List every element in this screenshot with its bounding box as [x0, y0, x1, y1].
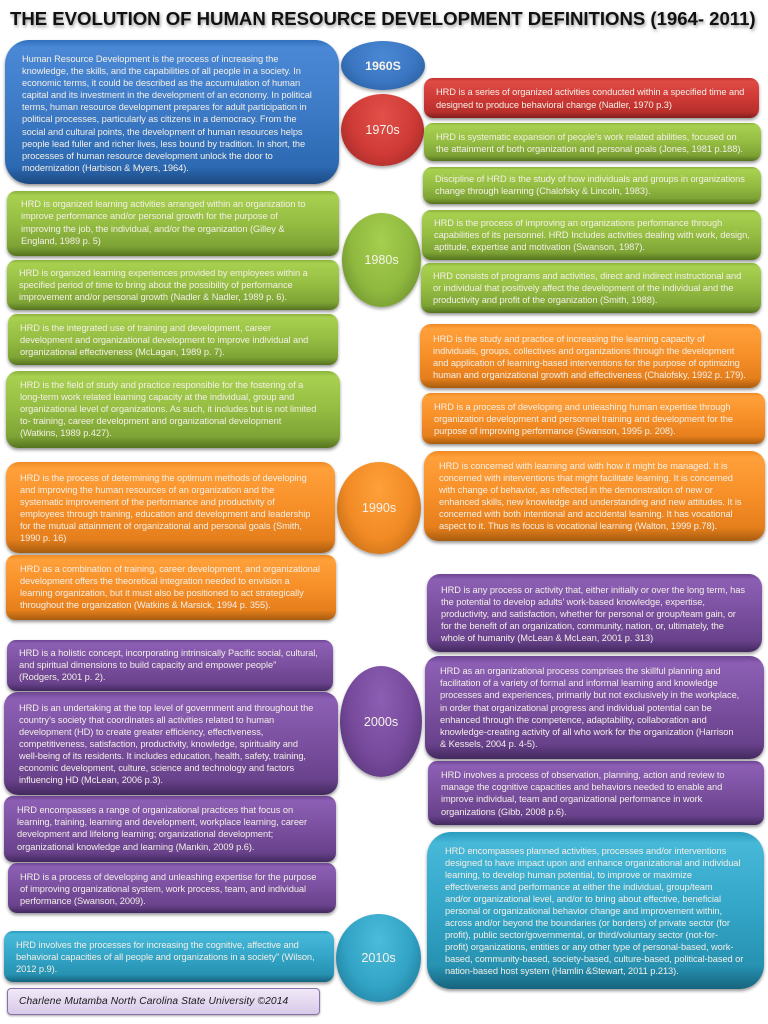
panel: Harrison and Kessels: & Kessels, 2004 p. 4-5).: [440, 739, 538, 749]
panel: Harrison and Kessels: in order that organizational progress and individual potential can be: [440, 703, 712, 713]
panel: Swanson 2009: of improving organizational system, work process, team, and individual: [20, 884, 306, 894]
panel: 1960s Harbison and Myers definition: Human Resource Development is the process of increasing the: [22, 54, 278, 64]
panel: Swanson 2009: HRD is a process of developing and unleashing expertise for the purpose: [20, 872, 316, 882]
panel: Nadler 1970: HRD is a series of organized activities conducted within a specified time and: [436, 87, 744, 97]
panel: Chalofsky and Lincoln: Discipline of HRD is the study of how individuals and groups in organizations: [435, 174, 745, 184]
panel: Jones 1981: the attainment of both organization and personal goals (Jones, 1981 p.188).: [436, 144, 743, 154]
panel: Chalofsky 1992: HRD is the study and practice of increasing the learning capacity of: [433, 334, 705, 344]
badge: 2010s: [336, 914, 421, 1002]
panel: Swanson 1987: aptitude, expertise and motivation (Swanson, 1987).: [434, 242, 645, 252]
panel: Walton 1999: [424, 451, 765, 541]
panel: Hamlin and Stewart: personal or organizational behavior change and improvement within,: [445, 906, 722, 916]
panel: Jones 1981: HRD is systematic expansion of people’s work related abilities, focused on: [436, 132, 737, 142]
badge: 1980s: 1980s: [364, 253, 399, 267]
panel: Watkins 1989: HRD is the field of study and practice responsible for the fostering of a: [20, 380, 303, 390]
panel: Smith 1990: employees through training, education and development and leadership: [20, 509, 310, 519]
panel: 1960s Harbison and Myers definition: political processes, particularly as citizens in a democracy. From the: [22, 114, 296, 124]
panel: Smith 1990: [6, 462, 335, 553]
panel: Swanson 1995: HRD is a process of developing and unleashing human expertise through: [434, 402, 730, 412]
panel: Harrison and Kessels: knowledge-creating activity of all who work for the organization (Harrison: [440, 727, 734, 737]
panel: Nadler 1970: [424, 78, 759, 118]
panel: Smith 1988: [421, 263, 761, 313]
panel: Swanson 1987: HRD is the process of improving an organizations performance through: [434, 218, 722, 228]
panel: Harrison and Kessels: enhanced through the competence, adaptability, collaboration and: [440, 715, 707, 725]
panel: Jones 1981: [424, 123, 761, 161]
badge: 1990s: 1990s: [362, 501, 396, 515]
panel: Watkins 1989: long-term work related learning capacity at the individual, group and: [20, 392, 294, 402]
panel: McLagan: HRD is the integrated use of training and development, career: [20, 323, 271, 333]
panel: Walton 1999: concerned with both intentional and accidental learning. It has vocational: [439, 509, 733, 519]
panel: McLean 2006: HRD is an undertaking at the top level of government and throughout the: [19, 703, 313, 713]
panel: Watkins 1989: [6, 371, 340, 448]
panel: Mankin: organizational knowledge and learning (Mankin, 2009 p.6).: [17, 842, 254, 852]
credit: Charlene Mutamba North Carolina State University ©2014: [19, 996, 288, 1007]
panel: Walton 1999: aspect to it. Thus its focus is vocational learning (Walton, 1999 p.78).: [439, 521, 717, 531]
panel: Chalofsky 1992: [420, 324, 761, 388]
panel: 1960s Harbison and Myers definition: people lead fuller and richer lives, less bound by tradition. In short, the: [22, 139, 305, 149]
panel: Gilley and England: improving the job, the individual, and/or the organization (Gilley &: [21, 224, 284, 234]
panel: Swanson 1987: capabilities of its personnel. HRD Includes activities dealing with work, design,: [434, 230, 750, 240]
panel: Mankin: development and lifelong learning; organizational development;: [17, 829, 273, 839]
panel: Hamlin and Stewart: profit) organizations, entities or any other type of personal-based, work-: [445, 942, 733, 952]
badge: 2000s: 2000s: [364, 714, 398, 728]
panel: Watkins and Marsick: development offers the theoretical integration needed to envision a: [20, 576, 290, 586]
panel: Harrison and Kessels: facilitation of a variety of formal and informal learning and knowledge: [440, 678, 718, 688]
panel: Watkins and Marsick: HRD as a combination of training, career development, and organizational: [20, 564, 320, 574]
panel: Chalofsky 1992: human and organizational growth and effectiveness (Chalofsky, 1992 p. 179).: [433, 370, 746, 380]
badge: 1970s: [341, 94, 424, 166]
panel: Rodgers: HRD is a holistic concept, incorporating intrinsically Pacific social, cultural,: [19, 648, 318, 658]
panel: Smith 1988: productivity and profit of the organization (Smith, 1988).: [433, 295, 657, 305]
panel: McLean 2006: economic development, culture, science and technology and factors: [19, 763, 294, 773]
panel: Gilley and England: England, 1989 p. 5): [21, 236, 101, 246]
panel: 1960s Harbison and Myers definition: social and cultural points, the development of human resources helps: [22, 127, 303, 137]
panel: Smith 1990: 1990 p. 16): [20, 533, 66, 543]
title: THE EVOLUTION OF HUMAN RESOURCE DEVELOPMENT DEFINITIONS (1964- 2011): [10, 8, 756, 29]
panel: Swanson 1987: [422, 210, 761, 260]
panel: Hamlin and Stewart: [427, 832, 764, 989]
panel: Walton 1999: enhanced skills, new knowledge and understanding and new attitudes. It is: [439, 497, 741, 507]
panel: Swanson 1995: purpose of improving performance (Swanson, 1995 p. 208).: [434, 426, 676, 436]
panel: Hamlin and Stewart: nation-based host system (Hamlin &Stewart, 2011 p.213).: [445, 966, 679, 976]
panel: Wilson: 2012 p.9).: [16, 964, 57, 974]
panel: Harrison and Kessels: [425, 656, 764, 759]
panel: Harrison and Kessels: processes and experiences, primarily but not exclusively in the workplace,: [440, 690, 739, 700]
panel: 1960s Harbison and Myers definition: terms, human resource development prepares for adult participation in: [22, 102, 307, 112]
panel: Wilson: [4, 931, 334, 982]
panel: Wilson: HRD involves the processes for increasing the cognitive, affective and: [16, 940, 299, 950]
panel: McLean and McLean 2001: productivity, and satisfaction, whether for personal or group/team gain, or: [441, 609, 736, 619]
panel: Gilley and England: [7, 191, 339, 256]
panel: Gibb: organizations (Gibb, 2008 p.6).: [441, 807, 566, 817]
panel: Swanson 1995: [422, 393, 765, 444]
panel: Hamlin and Stewart: designed to have impact upon and enhance organizational and individual: [445, 858, 740, 868]
panel: 1960s Harbison and Myers definition: [5, 40, 339, 184]
panel: Hamlin and Stewart: learning, to develop human potential, to improve or maximize: [445, 870, 692, 880]
panel: 1960s Harbison and Myers definition: modernization (Harbison & Myers, 1964).: [22, 163, 189, 173]
panel: Chalofsky and Lincoln: change through learning (Chalofsky & Lincoln, 1983).: [435, 186, 650, 196]
panel: Walton 1999: with change of behavior, as reflected in the demonstration of new or: [439, 485, 713, 495]
panel: 1960s Harbison and Myers definition: processes of human resource development unlock the door to: [22, 151, 273, 161]
panel: Watkins and Marsick: [6, 555, 336, 620]
panel: Mankin: [4, 796, 336, 862]
panel: Smith 1990: for the mutual attainment of organizational and personal goals (Smith,: [20, 521, 302, 531]
panel: McLean and McLean 2001: [427, 574, 762, 652]
panel: 1960s Harbison and Myers definition: knowledge, the skills, and the capabilities of all people in a society. In: [22, 66, 301, 76]
panel: Smith 1990: systematic improvement of the performance and productivity of: [20, 497, 275, 507]
panel: Watkins and Marsick: learning organization, but it must also be positioned to act strategically: [20, 588, 304, 598]
credit: [7, 988, 320, 1015]
panel: Walton 1999: concerned with interventions that might facilitate learning. It is concerned: [439, 473, 733, 483]
panel: Hamlin and Stewart: profit), public sector/governmental, or third/voluntary sector (not-for-: [445, 930, 718, 940]
panel: Chalofsky and Lincoln: [423, 167, 761, 204]
panel: Nadler and Nadler: [7, 260, 339, 310]
panel: Mankin: learning, training, learning and development, workplace learning, career: [17, 817, 307, 827]
panel: Rodgers: [7, 640, 333, 691]
panel: Swanson 2009: [8, 863, 336, 913]
panel: McLagan: [8, 314, 338, 365]
panel: McLean 2006: country’s society that coordinates all activities related to human: [19, 715, 274, 725]
panel: McLagan: development and organizational development to improve individual and: [20, 335, 308, 345]
panel: Nadler and Nadler: improvement and/or personal growth (Nadler & Nadler, 1989 p. 6).: [19, 292, 287, 302]
panel: Chalofsky 1992: and application of learning-based interventions for the purpose of optimizing: [433, 358, 740, 368]
panel: Wilson: behavioral capacities of all people and organizations in a society” (Wilson,: [16, 952, 315, 962]
panel: Gibb: manage the cognitive capacities and behaviors needed to enable and: [441, 782, 722, 792]
panel: Smith 1988: HRD consists of programs and activities, direct and indirect instructional and: [433, 271, 741, 281]
panel: McLean and McLean 2001: the potential to develop adults’ work-based knowledge, expertise,: [441, 597, 705, 607]
panel: 1960s Harbison and Myers definition: economic terms, it could be described as the accumulation of human: [22, 78, 300, 88]
panel: Watkins and Marsick: throughout the organization (Watkins & Marsick, 1994 p. 355).: [20, 600, 271, 610]
panel: Hamlin and Stewart: based, community-based, society-based, culture-based, political-based or: [445, 954, 743, 964]
panel: Gibb: HRD involves a process of observation, planning, action and review to: [441, 770, 725, 780]
panel: 1960s Harbison and Myers definition: capital and its investment in the development of an economy. In political: [22, 90, 312, 100]
panel: Mankin: HRD encompasses a range of organizational practices that focus on: [17, 805, 293, 815]
panel: Gibb: [428, 761, 764, 825]
badge: 1960S: [341, 41, 425, 90]
panel: McLean and McLean 2001: HRD is any process or activity that, either initially or over the long term, has: [441, 585, 745, 595]
panel: Gilley and England: HRD is organized learning activities arranged within an organization to: [21, 199, 305, 209]
panel: Smith 1990: HRD is the process of determining the optimum methods of developing: [20, 473, 307, 483]
panel: Smith 1990: and improving the human resources of an organization and the: [20, 485, 274, 495]
panel: Smith 1988: or individual that positively affect the development of the individual and the: [433, 283, 733, 293]
panel: Rodgers: and spiritual dimensions to build capacity and empower people”: [19, 660, 276, 670]
panel: Harrison and Kessels: HRD as an organizational process comprises the skillful planning and: [440, 666, 720, 676]
panel: Nadler and Nadler: HRD is organized learning experiences provided by employees within a: [19, 268, 308, 278]
panel: Rodgers: (Rodgers, 2001 p. 2).: [19, 672, 105, 682]
panel: Swanson 2009: performance (Swanson, 2009).: [20, 896, 146, 906]
panel: Walton 1999: HRD is concerned with learning and with how it might be managed. It is: [439, 461, 728, 471]
panel: Gilley and England: improve performance and/or personal growth for the purpose of: [21, 211, 278, 221]
panel: McLean 2006: influencing HD (McLean, 2006 p.3).: [19, 775, 163, 785]
panel: Nadler and Nadler: specified period of time to bring about the possibility of performance: [19, 280, 293, 290]
badge: 1980s: [342, 213, 421, 307]
panel: Swanson 1995: organization development and personnel training and development for the: [434, 414, 733, 424]
badge: 2000s: [340, 666, 422, 777]
panel: McLean 2006: [4, 692, 338, 795]
panel: McLean 2006: competitiveness, satisfaction, productivity, knowledge, spirituality and: [19, 739, 298, 749]
panel: McLean and McLean 2001: for the benefit of an organization, community, nation, or, ultimately, the: [441, 621, 724, 631]
panel: Watkins 1989: (Watkins, 1989 p.427).: [20, 428, 112, 438]
panel: Watkins 1989: organizational level of organizations. As such, it includes but is not limited: [20, 404, 316, 414]
panel: Hamlin and Stewart: HRD encompasses planned activities, processes and/or interventions: [445, 846, 726, 856]
panel: McLagan: organizational effectiveness (McLagan, 1989 p. 7).: [20, 347, 225, 357]
panel: Chalofsky 1992: individuals, groups, collectives and organizations through the development: [433, 346, 734, 356]
panel: Hamlin and Stewart: across and/or beyond the boundaries (or borders) of private sector (for: [445, 918, 730, 928]
badge: 2010s: 2010s: [361, 951, 396, 965]
panel: McLean 2006: well-being of its residents. It includes education, health, safety, training,: [19, 751, 306, 761]
panel: McLean 2006: development (HD) to create greater efficiency, effectiveness,: [19, 727, 263, 737]
panel: Hamlin and Stewart: and/or organizational level, and/or to bring about effective, beneficial: [445, 894, 721, 904]
panel: Hamlin and Stewart: effectiveness and performance at either the individual, group/team: [445, 882, 713, 892]
panel: McLean and McLean 2001: whole of humanity (McLean & McLean, 2001 p. 313): [441, 633, 653, 643]
panel: Nadler 1970: designed to produce behavioral change (Nadler, 1970 p.3): [436, 100, 672, 110]
panel: Watkins 1989: to- training, career development and organizational development: [20, 416, 281, 426]
panel: Gibb: improve individual, team and organizational performance in work: [441, 794, 702, 804]
badge: 1990s: [337, 462, 421, 554]
badge: 1970s: 1970s: [365, 123, 400, 137]
badge: 1960S: 1960S: [365, 58, 401, 72]
